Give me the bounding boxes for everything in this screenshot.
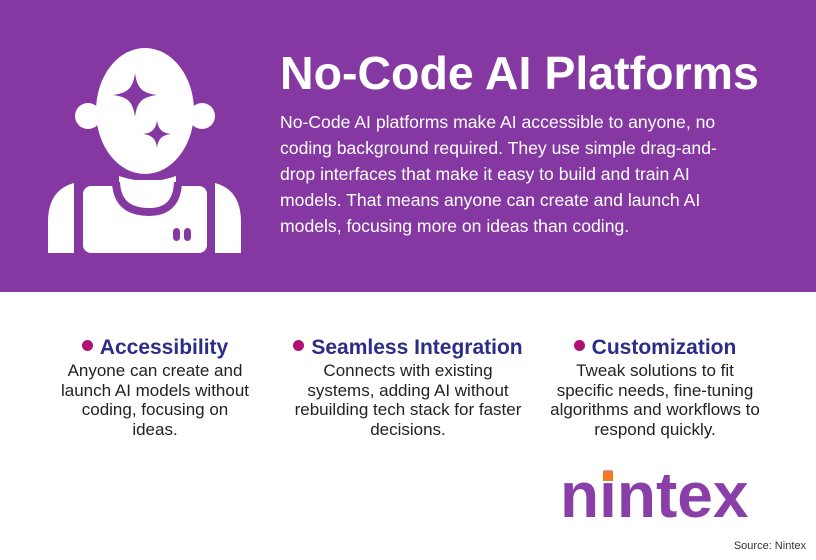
column: accessibility: Accessibility <box>100 336 228 359</box>
column: customization: Tweak solutions to fit specific needs, fine-tuning algorithms and workflows to respond quickly. <box>550 361 760 438</box>
header panel <box>0 0 816 292</box>
source: Source: Nintex <box>734 540 806 552</box>
title: No-Code AI Platforms <box>280 47 759 99</box>
description text: No-Code AI platforms make AI accessible to anyone, no coding background required. They use simple drag-and-drop interfaces that make it easy to build and train AI models. That means anyone can create and launch AI models, focusing more on ideas than coding. <box>280 112 717 236</box>
column: accessibility: Anyone can create and launch AI models without coding, focusing on ideas. <box>61 361 249 438</box>
column: seamless integration: Connects with existing systems, adding AI without rebuilding tech stack for faster decisions. <box>295 361 521 438</box>
icon: person with sparkles <box>48 48 241 253</box>
logo: nintex: nintex <box>560 460 749 530</box>
column: customization: Customization <box>592 336 736 359</box>
column: seamless integration: Seamless Integration <box>311 336 523 359</box>
